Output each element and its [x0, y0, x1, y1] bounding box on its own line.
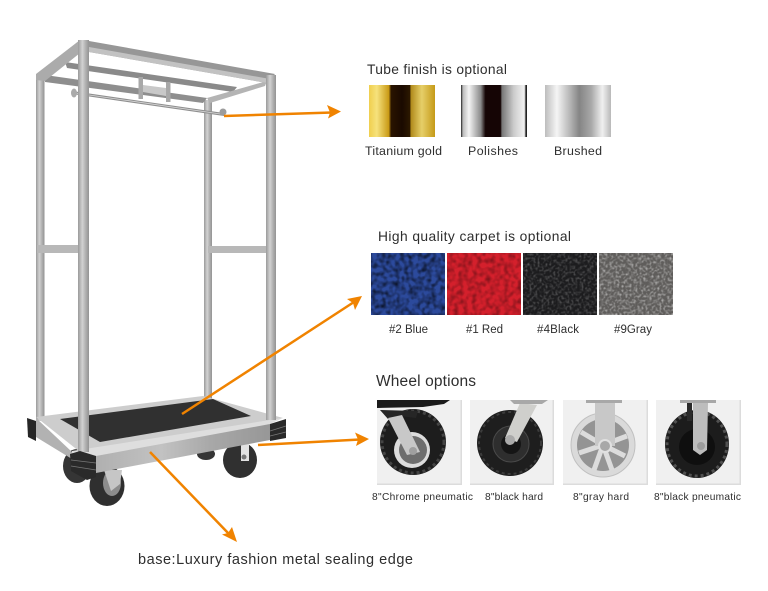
wheel panel: chrome pneumatic: [377, 400, 462, 485]
label: gray hard: 8"gray hard: [573, 492, 629, 503]
swatch: polishes: [461, 85, 527, 137]
wheel panel: gray hard: [563, 400, 648, 485]
hanging rail: [71, 88, 226, 116]
heading: carpet: High quality carpet is optional: [378, 229, 571, 244]
swatch: titanium gold: [369, 85, 435, 137]
front rail: [89, 41, 275, 83]
carpet swatch: gray: [599, 253, 673, 315]
label: black pneumatic: 8"black pneumatic: [654, 492, 741, 503]
lower crossbars: [37, 245, 268, 253]
wheel panel: black hard: [470, 400, 554, 485]
label: chrome pneumatic: 8"Chrome pneumatic: [372, 492, 473, 503]
right wheel: [223, 440, 257, 478]
heading: wheels: Wheel options: [376, 373, 476, 390]
label: titanium gold: Titanium gold: [365, 144, 442, 158]
middle rail: [65, 62, 237, 92]
label: black: #4Black: [537, 324, 579, 336]
back posts: [36, 76, 212, 421]
arrow: base: [150, 452, 237, 542]
swatch: brushed: [545, 85, 611, 137]
corner bumpers: [27, 418, 286, 480]
label: polishes: Polishes: [468, 144, 518, 158]
heading: tube finish: Tube finish is optional: [367, 62, 507, 77]
back wheels: [63, 448, 215, 483]
top frame: [36, 40, 275, 103]
carpet swatch: black: [523, 253, 597, 315]
label: blue: #2 Blue: [389, 324, 428, 336]
front posts: [78, 40, 276, 452]
left side rail: [36, 40, 80, 81]
label: gray: #9Gray: [614, 324, 652, 336]
cart illustration: [27, 40, 286, 506]
arrow: carpet: [182, 296, 362, 414]
right side rail: [207, 81, 267, 103]
wheel panel: black pneumatic: [656, 400, 741, 485]
carpet mat: [60, 399, 251, 442]
label: red: #1 Red: [466, 324, 503, 336]
arrow: rail to tube finish: [224, 105, 341, 118]
back rail: [45, 75, 207, 103]
carpet swatch: blue: [371, 253, 445, 315]
base deck: [36, 396, 283, 473]
label: black hard: 8"black hard: [485, 492, 543, 503]
label: brushed: Brushed: [554, 144, 602, 158]
caption: base: base:Luxury fashion metal sealing edge: [138, 552, 413, 568]
front wheel: [90, 466, 124, 506]
arrow: wheels: [258, 432, 369, 446]
centre brackets: [138, 77, 170, 102]
carpet swatch: red: [447, 253, 521, 315]
